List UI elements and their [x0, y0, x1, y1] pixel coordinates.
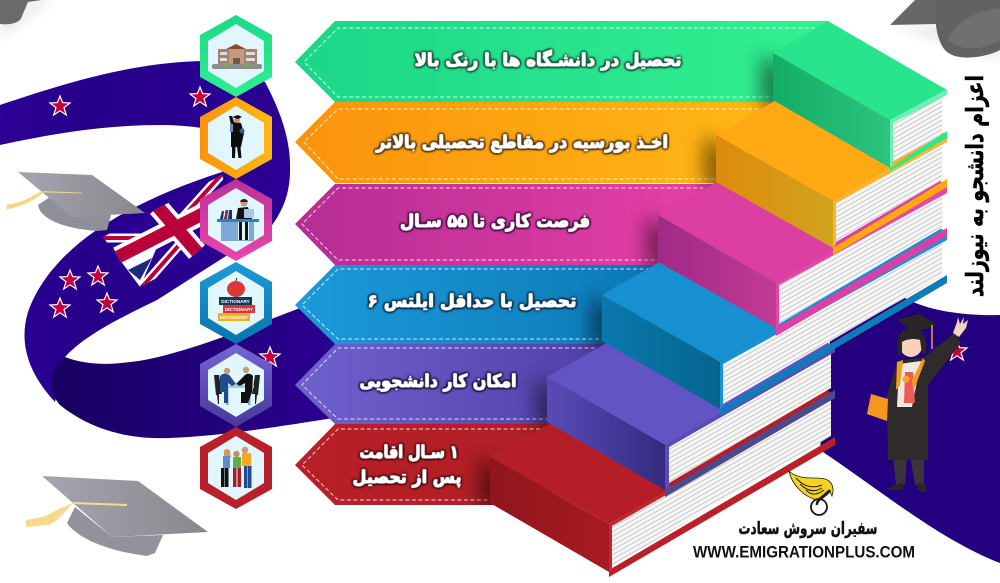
label 3: فرصت کاری تا ۵۵ سـال: [400, 211, 590, 232]
arrow banners: [295, 21, 828, 505]
gown: [887, 333, 961, 460]
icon: person at desk: [217, 199, 259, 241]
arrow 4: blue: [295, 265, 662, 344]
graduate character: [867, 314, 968, 492]
book 6: red: [490, 330, 835, 577]
label 5: امکان کار دانشجویی: [360, 371, 516, 392]
orange lapels: [896, 358, 925, 392]
book 4: blue: [602, 165, 947, 416]
book 1: green: [773, 21, 947, 171]
icon: apple and dictionaries: DICTIONARY: [221, 299, 250, 304]
icon: three students: [221, 447, 252, 488]
label 6: ۱ سـال اقامت: [360, 442, 458, 463]
ribbon stars: [50, 87, 967, 366]
hexagon 3: work: [200, 179, 272, 261]
arrow 6: red: [295, 424, 552, 505]
book 3: magenta: [658, 118, 947, 336]
label 1: تحصیل در دانشـگاه ها با رنک بالا: [414, 49, 682, 71]
hexagon 1: university: [200, 15, 272, 97]
union jack on ribbon: [103, 175, 224, 287]
face, hair and cap: [897, 314, 937, 357]
book 5: purple: [547, 280, 835, 497]
book stack: [490, 21, 947, 577]
legs and shoes: [887, 455, 927, 492]
hexagon column: [200, 15, 272, 509]
website url: WWW.EMIGRATIONPLUS.COM: [693, 544, 915, 562]
icon: university building: [212, 44, 262, 69]
folder: [867, 394, 888, 421]
hexagon 2: scholarship graduate: [200, 97, 272, 179]
hexagon 6: residence: [200, 427, 272, 509]
arrow 3: magenta: [295, 184, 720, 265]
icon: two people at table: [214, 367, 260, 405]
arrow 1: green: [295, 21, 828, 102]
background ribbon: lower right: [820, 298, 1000, 563]
title: vertical: اعزام دانشجو به نیوزلند: [961, 75, 989, 297]
shirt and tie: [897, 361, 921, 407]
logo: [693, 471, 915, 562]
label 4: تحصیل با حداقل ایلتس ۶: [367, 291, 576, 312]
icon: apple and dictionaries: DICTIONARY: [220, 315, 248, 320]
waving hand: [953, 317, 968, 337]
banner labels: [352, 49, 682, 488]
label 6: پس از تحصیل: [352, 467, 462, 488]
book 2: orange: [716, 69, 947, 255]
icon: graduate figure: [229, 115, 244, 158]
label 2: اخـذ بورسیه در مقاطع تحصیلی بالاتر: [375, 132, 668, 153]
graduation cap: bottom left: [26, 476, 208, 556]
arrow 2: orange: [295, 102, 775, 183]
hexagon 4: dictionaries: [200, 262, 272, 344]
logo name: سفیران سروش سعادت: [738, 519, 878, 539]
icon: apple and dictionaries: DICTIONARY: [225, 307, 253, 312]
icon: apple and dictionaries: [218, 278, 255, 321]
book shadows on banners: [466, 47, 778, 505]
background ribbon: New Zealand flag band: [0, 61, 340, 438]
logo emblem: winged S: [789, 471, 833, 515]
hexagon 5: student job: [200, 344, 272, 427]
graduation cap: middle left: [7, 172, 145, 231]
arrow 5: purple: [295, 344, 612, 424]
graduation cap: top right corner: [890, 0, 1000, 60]
label 6: [352, 442, 462, 488]
graduation cap: top left corner: [0, 0, 55, 40]
